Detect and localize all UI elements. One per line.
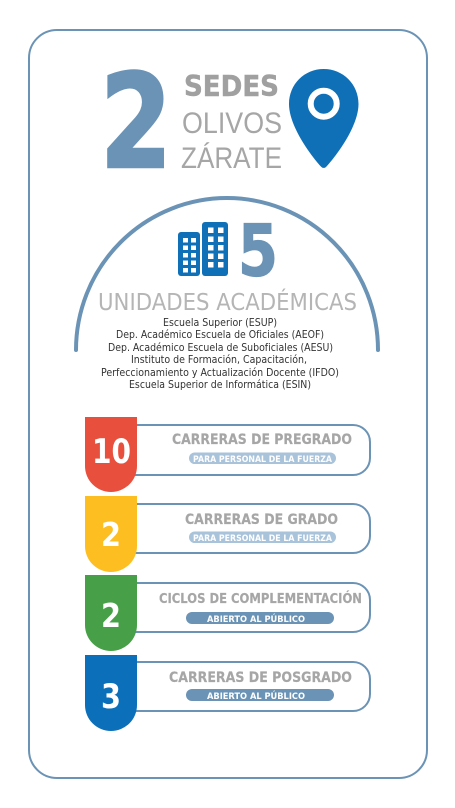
text: list of units: Dep. Académico Escuela de Suboficiales (AESU) (108, 342, 333, 354)
title: CARRERAS DE GRADO (185, 512, 338, 528)
pill (189, 452, 336, 464)
number: 3: 3 (101, 677, 121, 717)
heading: unidades académicas: UNIDADES ACADÉMICAS (98, 288, 357, 316)
card (110, 425, 370, 475)
number: 2: 2 (101, 515, 121, 554)
badge: 3 (85, 655, 137, 731)
number: 2: 2 (101, 596, 121, 635)
text: zárate: ZÁRATE (181, 142, 282, 175)
text: list of units: Escuela Superior de Informática (ESIN) (129, 379, 311, 391)
text: olivos: OLIVOS (182, 107, 282, 140)
title: CARRERAS DE POSGRADO (169, 670, 352, 686)
icon: buildings (178, 222, 228, 276)
text: list of units (101, 318, 339, 391)
row: ciclos de complementación (85, 575, 370, 651)
pill (186, 689, 334, 701)
big number 5: 5 (238, 210, 278, 292)
panel: sedes (100, 46, 358, 198)
card (110, 504, 370, 553)
row: carreras de pregrado (85, 417, 370, 492)
pill text: ABIERTO AL PÚBLICO (207, 690, 305, 702)
pill (189, 532, 336, 543)
pill text: PARA PERSONAL DE LA FUERZA (193, 534, 332, 544)
badge: 2 (85, 496, 137, 572)
text: list of units: Instituto de Formación, Capacitación, (131, 354, 307, 366)
title: CICLOS DE COMPLEMENTACIÓN (159, 589, 362, 607)
title: CARRERAS DE PREGRADO (172, 432, 352, 448)
pill text: ABIERTO AL PÚBLICO (207, 613, 305, 625)
badge: 2 (85, 575, 137, 651)
card (110, 662, 370, 711)
card (110, 583, 370, 632)
text: list of units: Perfeccionamiento y Actualización Docente (IFDO) (101, 367, 339, 379)
icon: map pin (289, 69, 358, 168)
pill (186, 612, 334, 624)
text: list of units: Dep. Académico Escuela de Oficiales (AEOF) (116, 329, 324, 341)
number: 10: 10 (92, 432, 131, 472)
row: carreras de posgrado (85, 655, 370, 731)
text: list of units: Escuela Superior (ESUP) (163, 318, 277, 329)
panel: unidades académicas (76, 198, 378, 391)
pill text: PARA PERSONAL DE LA FUERZA (193, 455, 332, 465)
arc (76, 198, 378, 350)
heading: sedes: SEDES (184, 70, 279, 103)
row: carreras de grado (85, 496, 370, 572)
badge: 10 (85, 417, 137, 492)
big number 2: 2 (100, 46, 172, 198)
